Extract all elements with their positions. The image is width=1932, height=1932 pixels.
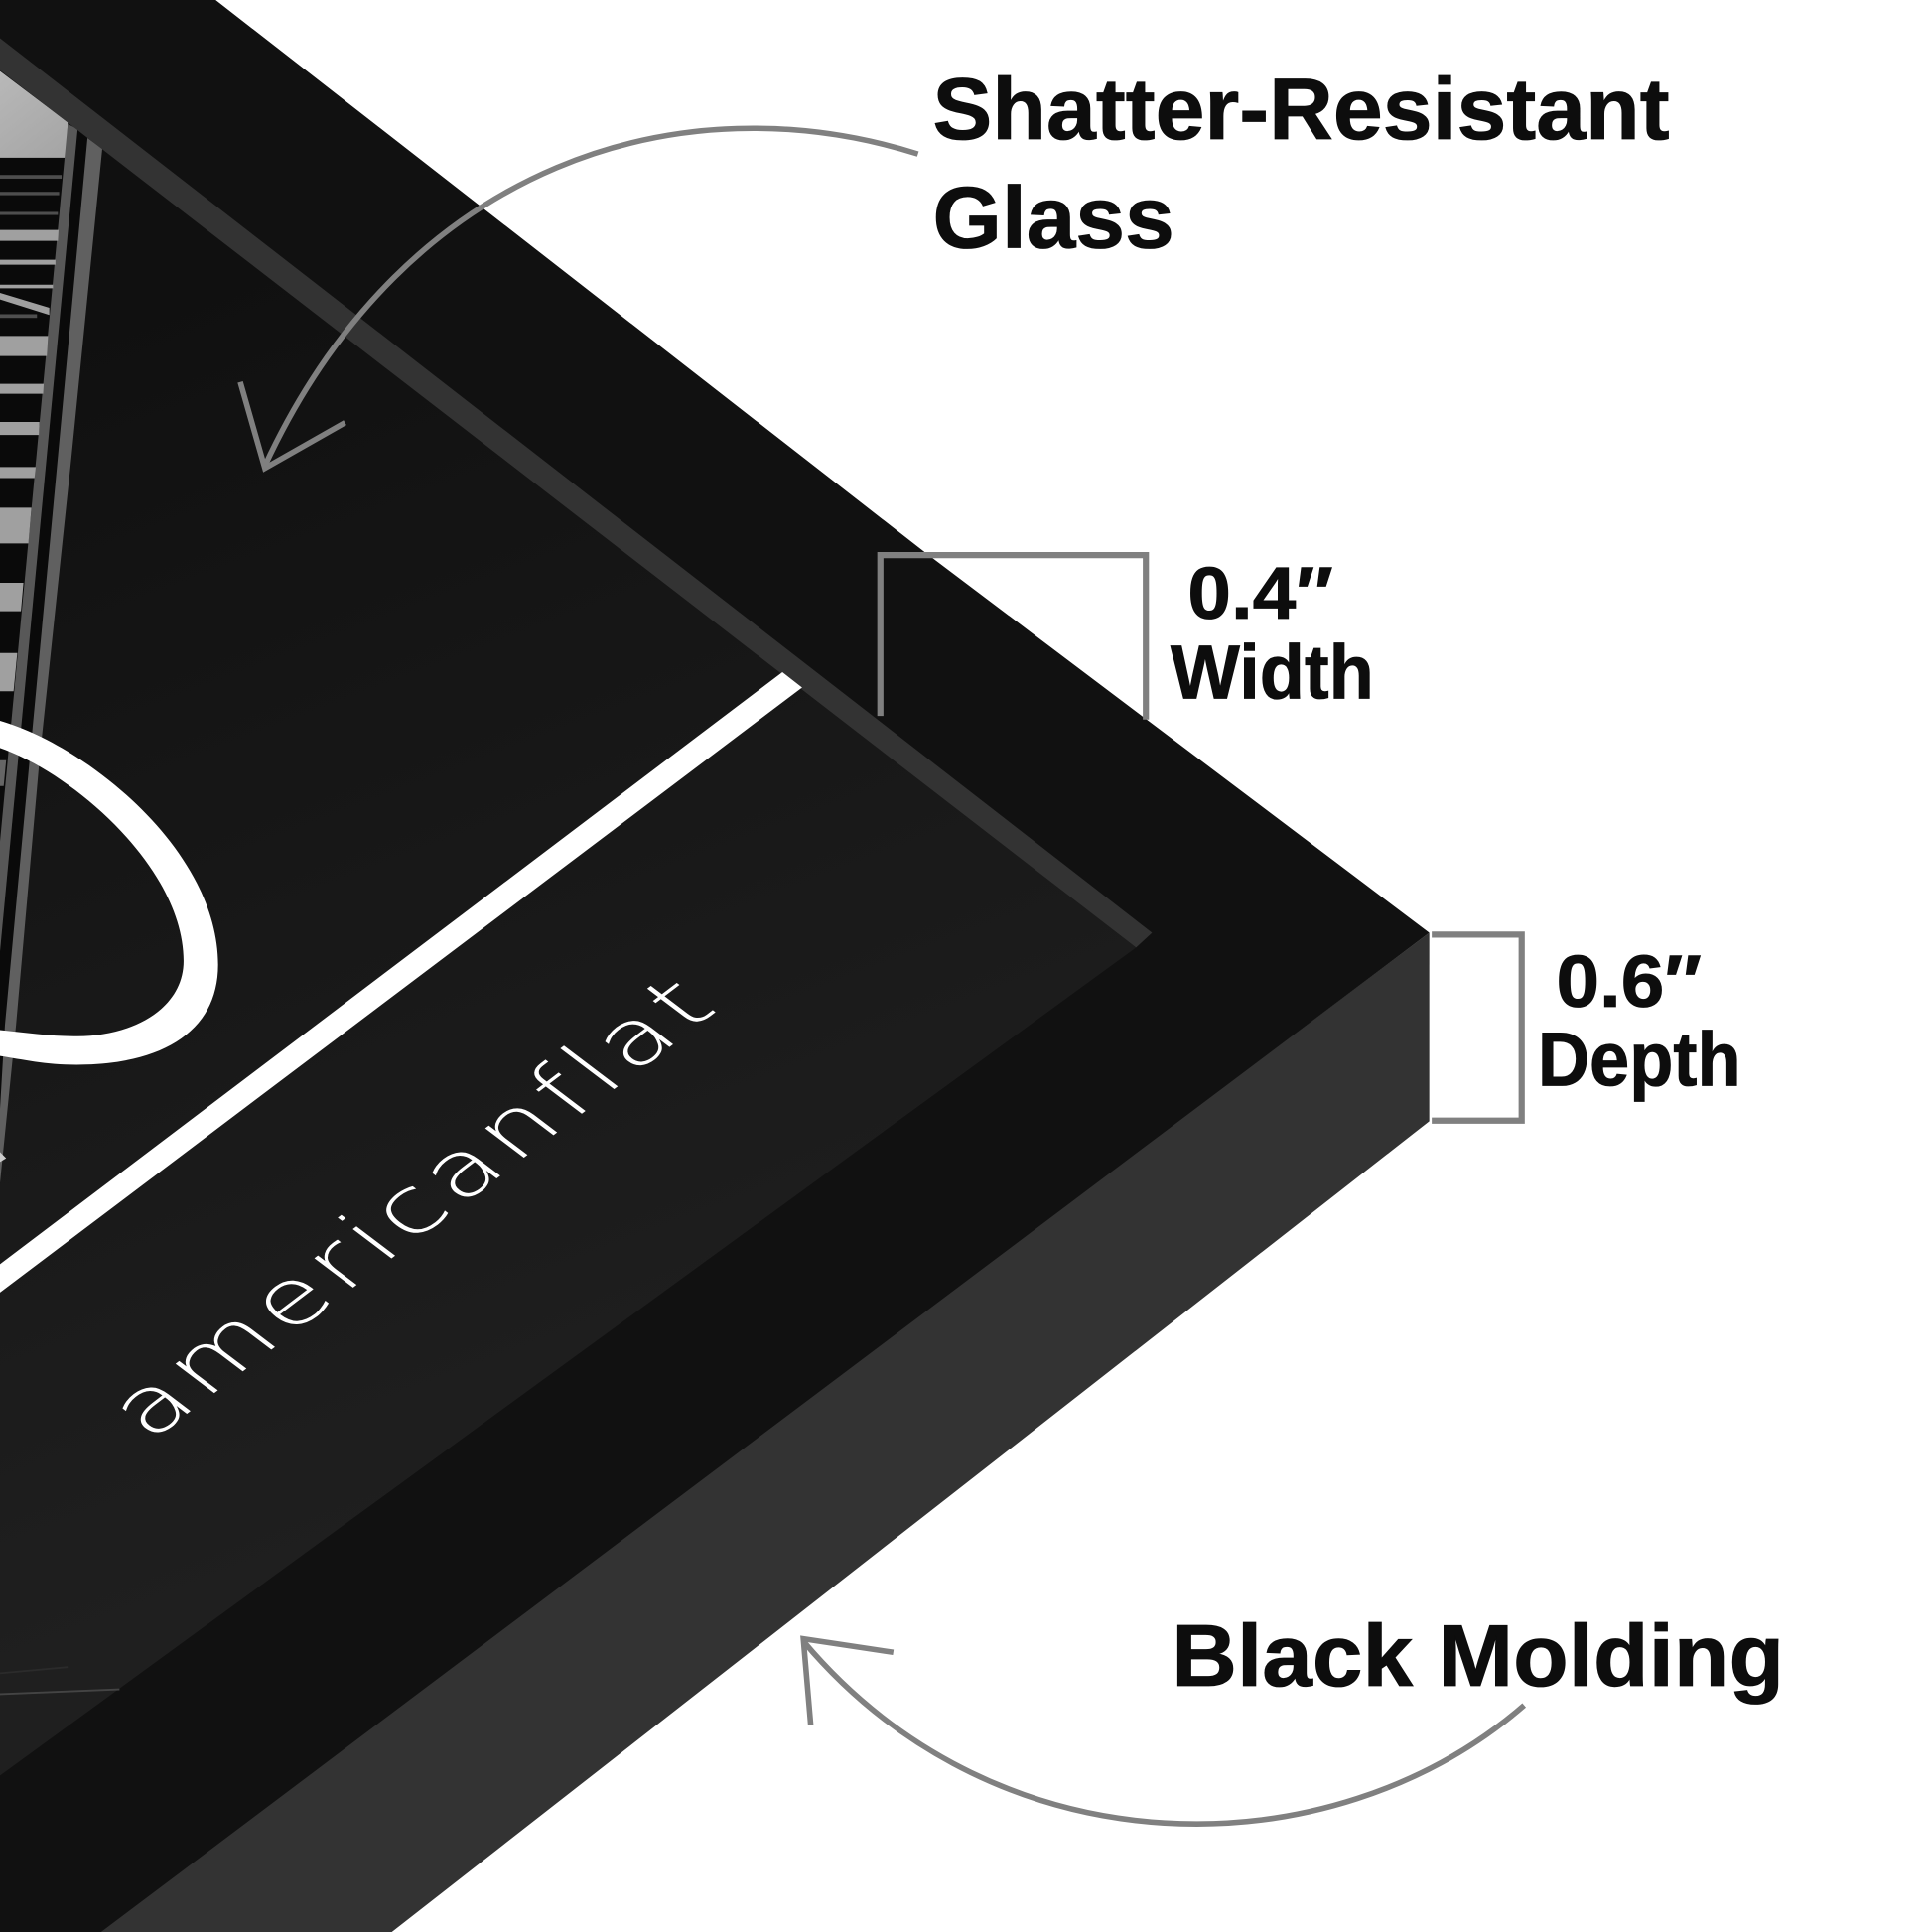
label: depth measurement — [1538, 940, 1741, 1102]
frame front face: black molding — [0, 0, 1430, 1932]
heading: shatter-resistant glass: Shatter-Resistant — [932, 60, 1670, 158]
poster brand text: americanflat — [84, 959, 737, 1454]
label: depth measurement: 0.6″ — [1556, 940, 1702, 1023]
bracket: depth — [1432, 934, 1522, 1121]
heading: black molding: Black Molding — [1172, 1606, 1784, 1705]
heading: shatter-resistant glass — [932, 60, 1670, 266]
bracket: width — [881, 555, 1146, 720]
frame side face: black molding depth — [96, 932, 1430, 1932]
poster photo: staircase strip — [0, 71, 102, 1182]
arrow: molding callout — [803, 1639, 1524, 1824]
glass edge band — [0, 38, 1152, 947]
label: width measurement — [1171, 552, 1374, 716]
label: width measurement: 0.4″ — [1187, 552, 1333, 634]
poster artwork: white diagonal rule — [0, 672, 802, 1293]
label: width measurement: Width — [1171, 630, 1374, 716]
poster artwork: white ring — [0, 721, 218, 1064]
label: depth measurement: Depth — [1538, 1017, 1741, 1102]
arrow: glass callout — [240, 128, 918, 469]
heading: shatter-resistant glass: Glass — [932, 168, 1174, 266]
poster photo: faint lines at bottom — [0, 1667, 119, 1694]
poster panel under glass — [0, 70, 1136, 1775]
